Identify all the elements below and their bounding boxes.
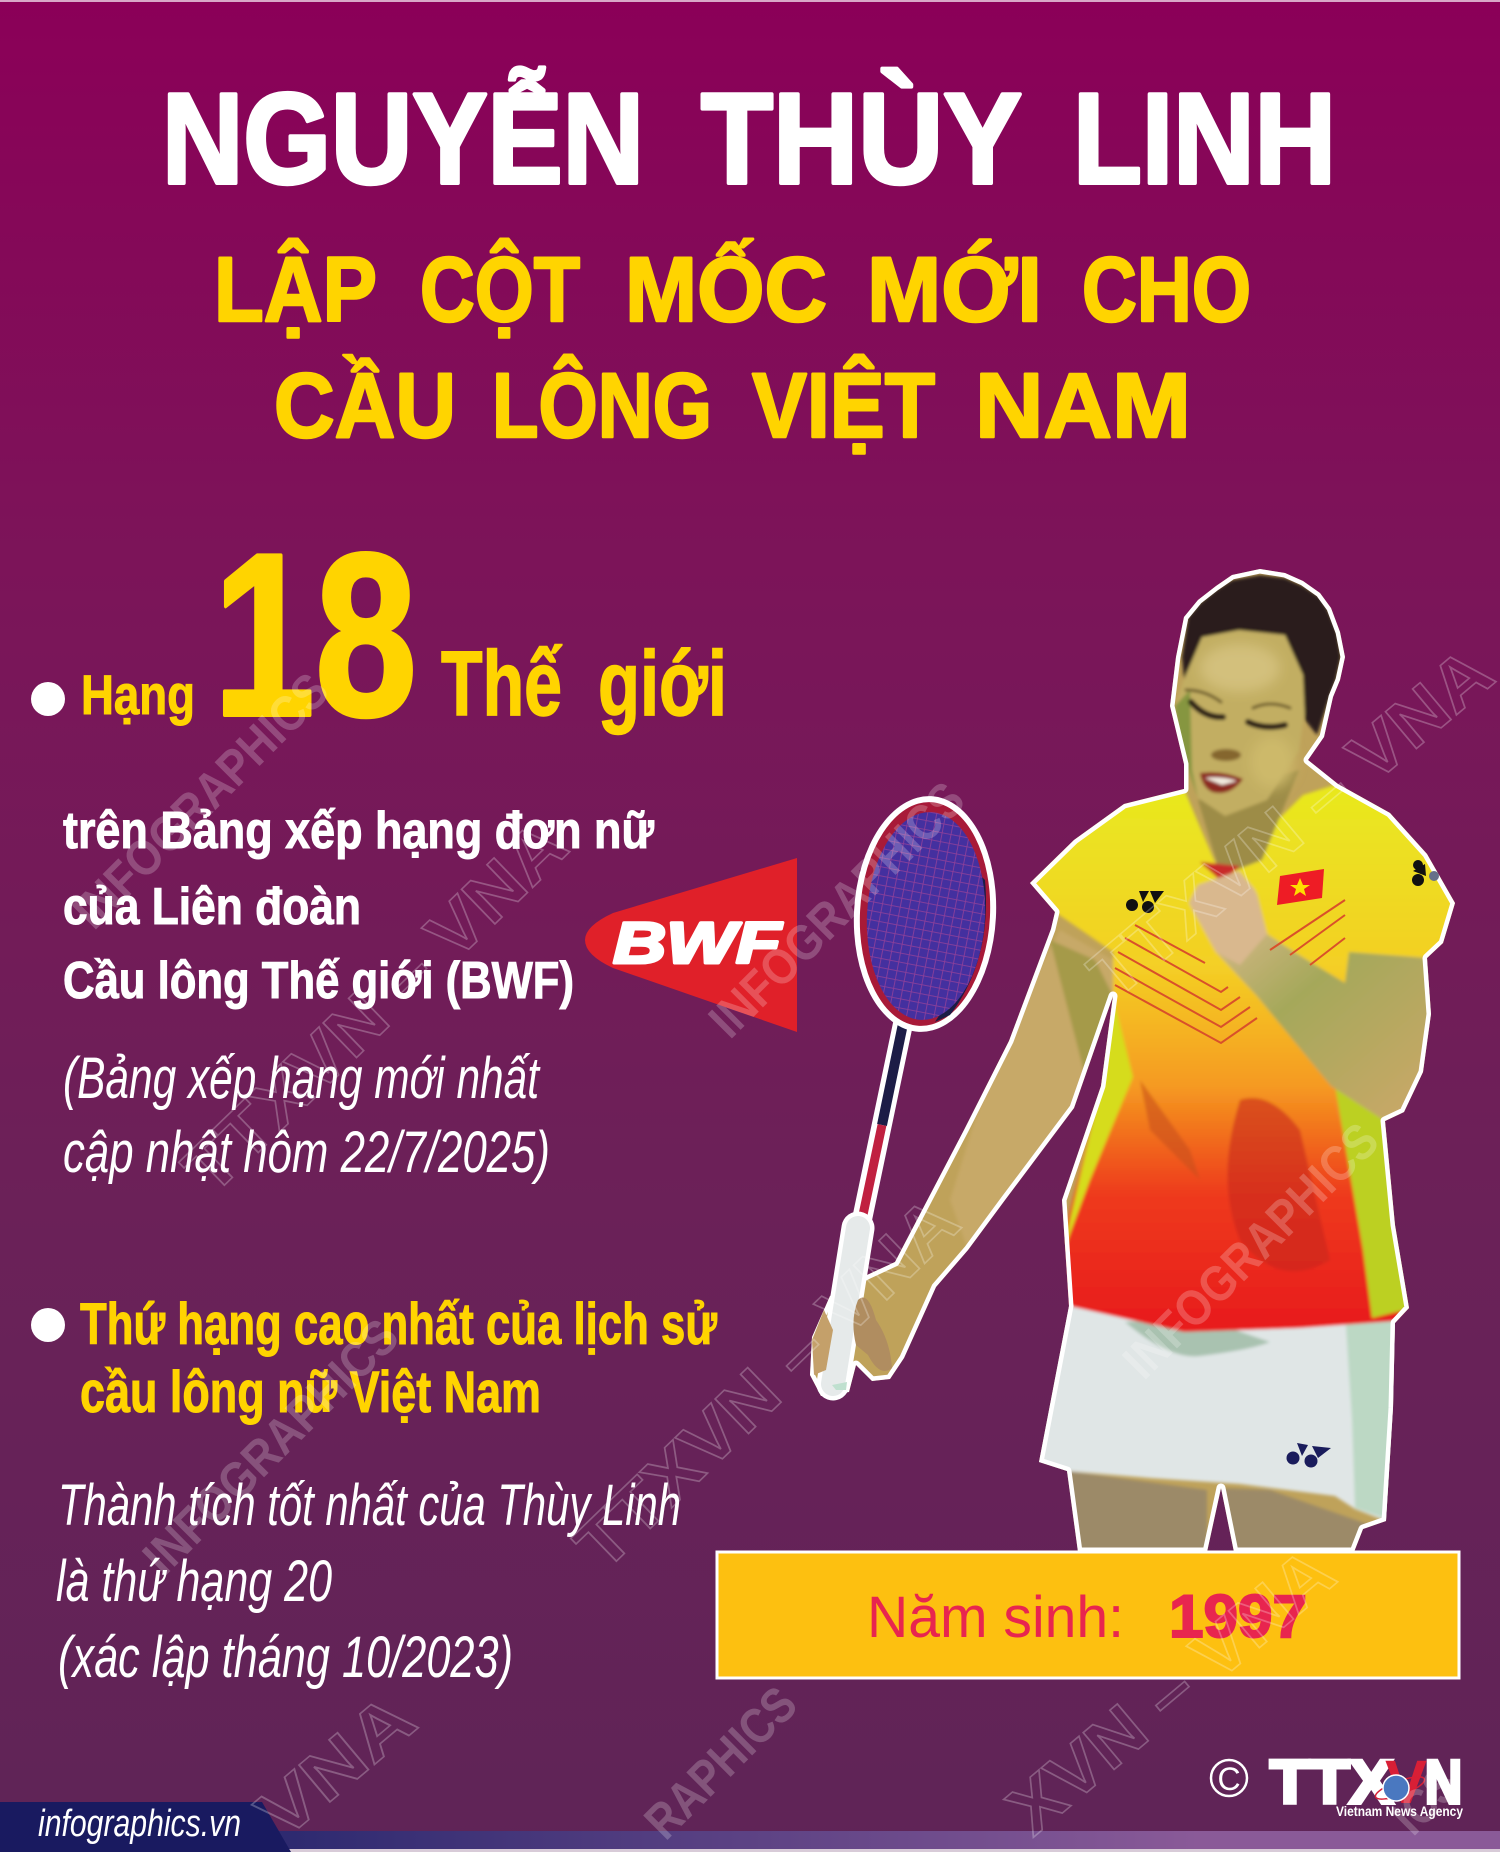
face: [1175, 630, 1306, 816]
panel: highest ranking: [31, 1292, 717, 1690]
shirt side panels: [1062, 996, 1133, 1255]
logo: TTXVN: [1270, 1748, 1463, 1819]
eyes and brows: [1186, 690, 1290, 727]
logo: TTXVN: Vietnam News Agency: [1336, 1804, 1463, 1819]
subtitle: [214, 238, 1251, 457]
text block: BWF ranking: của Liên đoàn: [63, 878, 361, 936]
subtitle: CHO: [1082, 239, 1251, 341]
label: giới: giới: [598, 633, 727, 735]
watermarks: INFOGRAPHICS: [1112, 1112, 1389, 1389]
neck: [1198, 770, 1299, 876]
subtitle: VIỆT: [752, 354, 935, 457]
subtitle: LẬP: [214, 238, 377, 341]
racket handle and fingers: [812, 1228, 892, 1390]
logo: TTXVN: TTX: [1270, 1748, 1393, 1816]
icon: BWF logo: BWF: [613, 911, 783, 976]
heading: cầu lông nữ Việt Nam: [80, 1360, 541, 1425]
icon: BWF logo: [585, 858, 797, 1032]
icon: Yonex logo skirt: [1286, 1443, 1331, 1468]
heading: [80, 1292, 717, 1425]
subtitle: MỚI: [867, 238, 1042, 341]
watermarks: [62, 632, 1500, 1852]
watermarks: VNA: [242, 1678, 430, 1852]
label: Thế: Thế: [441, 633, 563, 735]
icon: copyright: [1211, 1760, 1247, 1797]
text block: BWF ranking: [63, 802, 654, 1010]
text block: (xác lập tháng 10/2023): [58, 1625, 513, 1690]
watermarks: ICS: [1381, 1756, 1470, 1845]
icon: copyright: C: [1217, 1761, 1241, 1797]
icon: Yonex logo chest: [1126, 891, 1164, 913]
text block: BWF ranking: Cầu lông Thế giới (BWF): [63, 952, 574, 1010]
watermarks: TTXVN – VNA: [560, 1181, 974, 1584]
chevrons on shirt: [1115, 900, 1345, 1043]
big number 18: 18: [213, 506, 417, 765]
label: Năm sinh:: [867, 1585, 1124, 1650]
shirt: [1030, 784, 1455, 1332]
watermarks: XVN – VNA: [992, 1532, 1349, 1849]
shirt shadows: [1228, 1098, 1330, 1271]
bullet: [31, 682, 65, 716]
athlete: [810, 569, 1455, 1552]
watermarks: RAPHICS: [634, 1676, 808, 1850]
title: LINH: [1073, 67, 1336, 211]
title: NGUYỄN: [162, 66, 644, 211]
icon: Yonex logo sleeve: [1412, 860, 1439, 886]
watermarks: TTXVN – VNA: [168, 805, 582, 1208]
text block: Thành tích tốt nhất của Thùy Linh: [58, 1473, 681, 1538]
footer strip: [0, 1802, 1500, 1852]
panel: birth year: [717, 1552, 1459, 1678]
logo: TTXVN: N: [1425, 1748, 1462, 1816]
watermarks: TTXVN – VNA: [1074, 632, 1500, 1013]
mouth: [1200, 772, 1243, 793]
logo: TTXVN: V: [1385, 1748, 1427, 1816]
label: Hạng: Hạng: [81, 663, 195, 726]
title: THÙY: [701, 67, 1022, 211]
legs: [1067, 1471, 1207, 1552]
subtitle: MỐC: [625, 238, 827, 341]
text block: [56, 1473, 681, 1690]
text block: update note: (Bảng xếp hạng mới nhất: [63, 1046, 541, 1111]
racket: [848, 792, 1002, 1229]
shading on left arm: [950, 930, 1113, 1250]
text block: update note: [63, 1046, 550, 1185]
nose: [1211, 749, 1241, 761]
value: 1997: [1169, 1583, 1307, 1650]
text block: BWF ranking: trên Bảng xếp hạng đơn nữ: [63, 802, 654, 860]
hair: [1182, 575, 1341, 735]
icon: Vietnam flag: [1277, 869, 1324, 905]
skirt: [1039, 1300, 1400, 1521]
text block: là thứ hạng 20: [56, 1549, 332, 1614]
bullet: [31, 1308, 65, 1342]
subtitle: LÔNG: [492, 354, 712, 457]
heading: Thứ hạng cao nhất của lịch sử: [80, 1292, 717, 1357]
subtitle: CẦU: [274, 354, 456, 457]
title: [162, 66, 1336, 211]
right arm and fist: [1216, 892, 1431, 1120]
subtitle: NAM: [975, 355, 1191, 457]
watermarks: INFOGRAPHICS: [132, 1308, 409, 1585]
text block: update note: cập nhật hôm 22/7/2025): [63, 1120, 550, 1185]
watermarks: INFOGRAPHICS: [698, 771, 975, 1048]
website label: infographics.vn: [38, 1803, 241, 1845]
subtitle: CỘT: [420, 238, 580, 341]
panel: rank 18: [31, 506, 727, 765]
watermarks: INFOGRAPHICS: [62, 662, 339, 939]
